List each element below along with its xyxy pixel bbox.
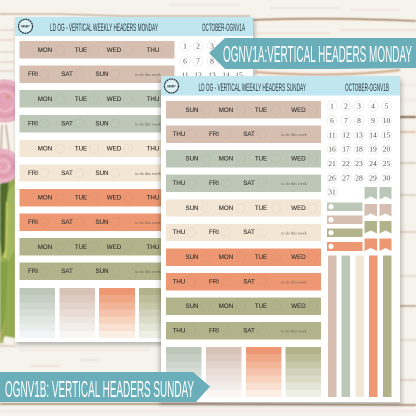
- row 6: to do this week: [281, 230, 308, 236]
- row 3: WED: [291, 156, 306, 163]
- row 2: [20, 66, 174, 83]
- row 10: FRI: [28, 268, 38, 275]
- row 9: MON: [219, 303, 233, 310]
- row 10: FRI: [209, 328, 219, 335]
- row 3: MON: [38, 96, 52, 103]
- row 7: [20, 189, 174, 206]
- row 6: [166, 224, 321, 241]
- row 6: SAT: [61, 170, 73, 177]
- calendar dates: 9: [371, 116, 375, 125]
- row 8: to do this week: [135, 220, 162, 225]
- row 2: FRI: [209, 131, 219, 138]
- row 1: TUE: [75, 47, 87, 54]
- row 10: to do this week: [281, 328, 308, 334]
- vertical strips: [328, 256, 392, 397]
- row 8: THU: [173, 279, 185, 286]
- row 5: MON: [38, 146, 52, 153]
- row 5: [166, 200, 321, 216]
- row 8: SAT: [243, 279, 255, 286]
- row 9: MON: [38, 244, 52, 251]
- row 7: [166, 248, 321, 266]
- row 5: [20, 140, 174, 157]
- row 2: FRI: [28, 71, 38, 78]
- ribbon: Sunday: [0, 372, 210, 402]
- calendar dates: 26: [328, 174, 336, 183]
- logo: MMP: [21, 25, 30, 29]
- row 4: THU: [173, 180, 185, 187]
- row 1: [166, 101, 321, 118]
- calendar dates: 18: [355, 145, 363, 154]
- calendar dates: 3: [357, 102, 361, 111]
- row 10: [166, 322, 321, 340]
- row 10: SAT: [61, 268, 73, 275]
- calendar dates: 20: [383, 145, 390, 154]
- sticker sheet: Sunday: [161, 76, 400, 402]
- row 5: WED: [291, 205, 306, 212]
- row 3: [20, 90, 174, 108]
- row 9: TUE: [255, 303, 267, 310]
- row 1: THU: [147, 47, 159, 54]
- row 10: to do this week: [135, 269, 162, 274]
- calendar dates: 31: [328, 188, 336, 197]
- text: OCTOBER-OGNV1A: [202, 22, 245, 34]
- row 4: [166, 174, 321, 192]
- row 1: SUN: [185, 107, 199, 114]
- row 2: to do this week: [135, 72, 162, 77]
- row 7: WED: [107, 195, 122, 202]
- calendar dates: 8: [210, 57, 214, 66]
- calendar dates: 3: [210, 42, 214, 51]
- row 8: FRI: [209, 279, 219, 286]
- header bar: [161, 76, 400, 96]
- row 3: TUE: [75, 96, 87, 103]
- row 10: SUN: [95, 268, 109, 275]
- sheet shadow: front: [159, 79, 402, 405]
- row 4: FRI: [28, 121, 38, 128]
- calendar dates: 15: [383, 131, 390, 140]
- row 9: WED: [291, 303, 306, 310]
- calendar dates: 15: [235, 70, 243, 80]
- row 7: WED: [291, 254, 306, 261]
- calendar dates: 17: [342, 145, 350, 154]
- row 4: [20, 115, 174, 132]
- calendar dates: 16: [328, 145, 336, 154]
- calendar dates: 19: [369, 145, 377, 154]
- flower: [0, 80, 26, 122]
- row 10: SAT: [243, 328, 255, 335]
- row 8: FRI: [28, 219, 38, 226]
- row 3: THU: [147, 96, 159, 103]
- calendar dates: 14: [369, 131, 377, 140]
- calendar dates: 6: [183, 57, 187, 66]
- calendar dates: 28: [355, 174, 363, 183]
- row 6: FRI: [28, 170, 38, 177]
- row 4: SAT: [61, 121, 73, 128]
- calendar dates: 22: [342, 159, 350, 168]
- calendar dates: 7: [344, 116, 348, 125]
- calendar dates: 24: [369, 159, 377, 168]
- calendar dates: 4: [371, 102, 375, 111]
- row 3: MON: [219, 156, 233, 163]
- logo: [164, 79, 178, 93]
- row 1: MON: [219, 107, 233, 114]
- flag tabs: [364, 187, 392, 251]
- row 4: to do this week: [135, 122, 162, 126]
- row 9: [166, 298, 321, 315]
- calendar dates: 25: [383, 159, 390, 168]
- row 1: TUE: [255, 107, 267, 114]
- calendar dates: 5: [385, 102, 389, 111]
- calendar dates: 13: [208, 70, 216, 80]
- row 6: SUN: [95, 170, 109, 177]
- row 4: to do this week: [281, 181, 308, 186]
- calendar dates: 12: [342, 131, 350, 140]
- row 3: SUN: [185, 156, 199, 163]
- row 1: MON: [38, 47, 52, 54]
- calendar dates: [180, 41, 243, 80]
- row 10: [20, 262, 174, 280]
- row 7: SUN: [185, 254, 199, 261]
- row 2: [166, 126, 321, 143]
- row 5: SUN: [185, 205, 199, 212]
- row 9: [20, 238, 174, 256]
- row 3: WED: [107, 96, 122, 103]
- row 7: THU: [147, 195, 159, 202]
- calendar dates: 27: [342, 174, 350, 183]
- calendar dates: 29: [369, 174, 377, 183]
- row 1: [20, 41, 174, 58]
- row 5: WED: [107, 146, 122, 153]
- row 6: [20, 164, 174, 182]
- row 9: WED: [107, 244, 122, 251]
- row 6: FRI: [209, 229, 219, 236]
- calendar dates: 6: [330, 116, 334, 125]
- row 9: SUN: [185, 303, 199, 310]
- row 9: TUE: [75, 244, 87, 251]
- row 8: [20, 214, 174, 231]
- row 4: SUN: [95, 121, 109, 128]
- row 2: THU: [173, 131, 185, 138]
- calendar dates: 13: [355, 131, 363, 140]
- row 8: to do this week: [281, 280, 308, 284]
- calendar dates: 2: [344, 102, 348, 111]
- row 4: SAT: [243, 180, 255, 187]
- gradient swatches: [20, 288, 175, 338]
- row 6: THU: [173, 229, 185, 236]
- calendar dates: 1: [183, 42, 187, 51]
- row 7: MON: [219, 254, 233, 261]
- row 5: TUE: [255, 205, 267, 212]
- row 8: SAT: [61, 219, 73, 226]
- row 3: TUE: [255, 156, 267, 163]
- row 5: MON: [219, 205, 233, 212]
- calendar dates: 23: [355, 159, 363, 168]
- row 2: SAT: [61, 71, 73, 78]
- row 10: THU: [173, 328, 185, 335]
- row 8: [166, 273, 321, 290]
- header bar: [15, 17, 253, 36]
- calendar dates: 10: [383, 116, 390, 125]
- calendar dates: 7: [196, 57, 200, 66]
- row 2: to do this week: [281, 132, 308, 137]
- label pills: [327, 202, 362, 251]
- calendar dates: 14: [222, 70, 230, 80]
- gradient swatches: [166, 347, 321, 397]
- row 9: THU: [147, 244, 159, 251]
- calendar dates: 8: [357, 116, 361, 125]
- row 7: TUE: [75, 195, 87, 202]
- logo: MMP: [167, 84, 176, 88]
- row 4: FRI: [209, 180, 219, 187]
- row 5: THU: [147, 146, 159, 153]
- row 2: SAT: [243, 131, 255, 138]
- row 1: WED: [291, 107, 306, 114]
- decoration: leaves and pink flowers: [0, 80, 26, 345]
- calendar dates: 30: [383, 174, 390, 183]
- flower: [0, 149, 20, 183]
- row 1: WED: [107, 47, 122, 54]
- row 7: TUE: [255, 254, 267, 261]
- calendar dates: 12: [194, 70, 202, 80]
- calendar dates: 11: [328, 131, 336, 140]
- header bar: LD OG - VERTICAL WEEKLY HEADERS MONDAY: [50, 22, 158, 34]
- row 7: MON: [38, 195, 52, 202]
- row 5: TUE: [75, 146, 87, 153]
- logo: [18, 19, 32, 33]
- calendar dates: 11: [181, 70, 189, 80]
- row 6: to do this week: [135, 171, 162, 176]
- row 8: SUN: [95, 219, 109, 226]
- sheet shadow: back: [16, 20, 255, 345]
- row 2: SUN: [95, 71, 109, 78]
- calendar dates: 21: [328, 159, 336, 168]
- sticker sheet: Monday: [15, 17, 253, 342]
- calendar dates: [327, 101, 392, 197]
- calendar dates: 2: [196, 42, 200, 51]
- row 3: [166, 150, 321, 168]
- calendar dates: 1: [330, 102, 334, 111]
- row 6: SAT: [243, 229, 255, 236]
